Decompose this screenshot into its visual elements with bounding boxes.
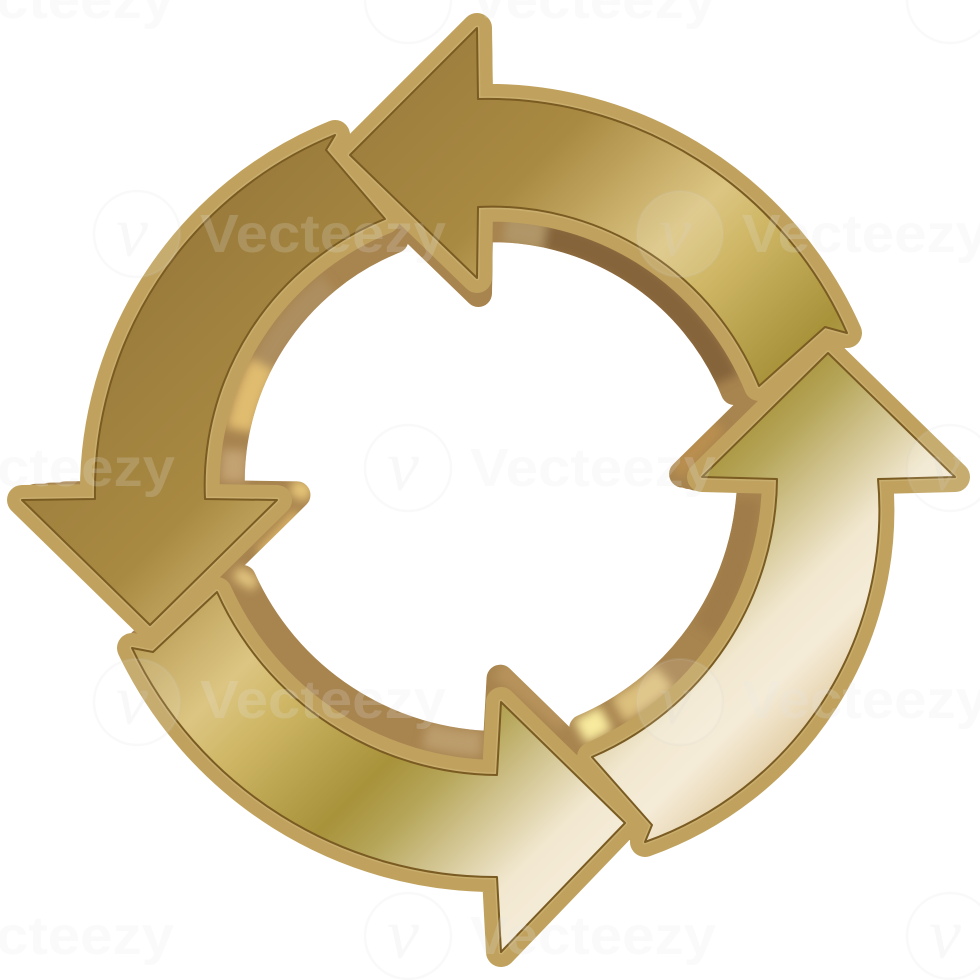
watermark: v — [929, 426, 961, 506]
arrow: top, pointing left — [350, 28, 847, 386]
watermark: Vecteezy — [742, 204, 980, 264]
watermark: Vecteezy — [742, 670, 980, 730]
watermark: v — [659, 192, 691, 272]
rim shading and highlights — [233, 229, 745, 744]
watermark: Vecteezy — [200, 670, 446, 730]
watermark: Vecteezy — [470, 438, 716, 498]
watermark: v — [387, 894, 419, 974]
watermark: v — [659, 660, 691, 740]
watermark: v — [387, 426, 419, 506]
watermark: v — [116, 660, 148, 740]
arrow: right, pointing up — [592, 353, 955, 842]
watermark: Vecteezy — [200, 204, 446, 264]
arrow: bottom, pointing right — [132, 592, 625, 952]
watermark: v — [929, 894, 961, 974]
watermark: Vecteezy — [470, 906, 716, 966]
watermark: v — [116, 192, 148, 272]
arrow: left, pointing down — [22, 135, 385, 625]
